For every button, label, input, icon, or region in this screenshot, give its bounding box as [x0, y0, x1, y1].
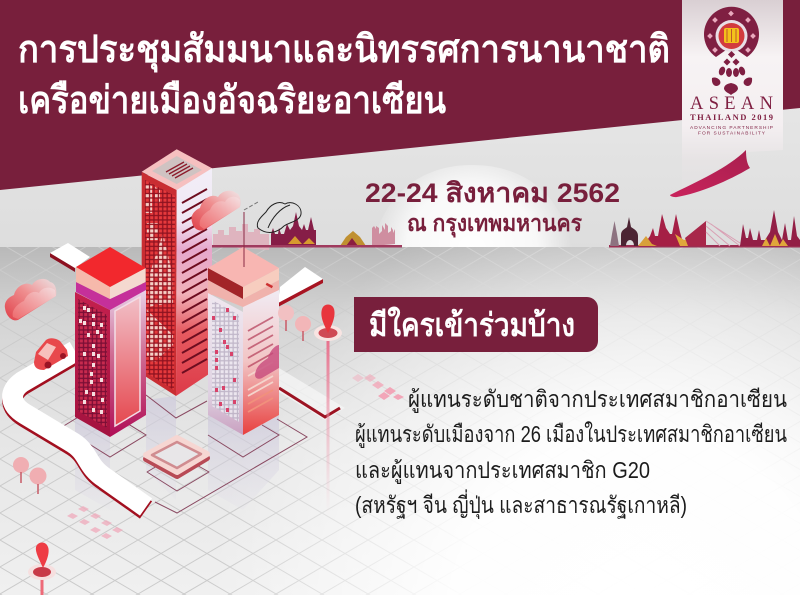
- ASEAN ribbon with logo: ADVANCING PARTNERSHIP: [690, 125, 773, 131]
- building reflections on floor: [75, 396, 279, 510]
- tower stripes: [182, 189, 207, 373]
- title: [18, 29, 670, 122]
- left building magenta band: [76, 282, 146, 310]
- outline cloud: [257, 203, 301, 232]
- left building lit windows: [79, 306, 104, 414]
- title: การประชุมสัมมนาและนิทรรศการนานาชาติ: [18, 29, 670, 73]
- curved main road: [13, 351, 146, 510]
- right building right face: [243, 287, 279, 435]
- trees lower left: [13, 457, 46, 494]
- heading badge: who attends: มีใครเข้าร่วมบ้าง: [369, 306, 575, 343]
- trees right: [278, 305, 311, 341]
- ASEAN wordmark: ASEAN: [690, 94, 773, 114]
- right building roof slab: [208, 268, 243, 299]
- left building body: [75, 292, 110, 437]
- tower right face: [176, 168, 212, 396]
- platform ring: [146, 438, 207, 476]
- pink squares by text: [352, 374, 404, 400]
- right building band: [208, 280, 279, 307]
- road upper left: [50, 243, 90, 272]
- left building roof slab: [76, 267, 110, 299]
- ASEAN logo: [704, 7, 759, 95]
- car: [34, 338, 68, 370]
- title: เครือข่ายเมืองอัจฉริยะอาเซียน: [18, 80, 446, 122]
- road lower right: [279, 368, 345, 420]
- cloud left: [5, 279, 56, 320]
- left building: [75, 247, 146, 437]
- antenna marker with dashed line: [244, 202, 258, 267]
- central tower: [142, 149, 212, 396]
- right building stripes: [248, 317, 273, 367]
- base outlines on floor: [62, 395, 307, 513]
- glow behind date: [372, 165, 572, 247]
- pin lower left: [28, 542, 56, 595]
- heading badge: who attends: [354, 297, 598, 352]
- tower lit windows: [145, 182, 173, 362]
- pin right: [314, 304, 342, 515]
- right building left face: [208, 293, 243, 435]
- tower roof: [142, 149, 212, 190]
- page background: upper grey band: [0, 0, 800, 250]
- ASEAN ribbon with logo: [670, 0, 783, 197]
- cloud upper: [192, 191, 241, 231]
- right building: [208, 247, 279, 435]
- title banner: [0, 0, 800, 190]
- left building inset panel: [115, 297, 140, 426]
- venue: ณ กรุงเทพมหานคร: [407, 210, 583, 238]
- skyline left: [212, 212, 402, 250]
- date: 22-24 สิงหาคม 2562: [365, 178, 620, 208]
- ribbon curl: [670, 150, 750, 197]
- ASEAN ribbon with logo: THAILAND 2019: [690, 112, 773, 122]
- body text: และผู้แทนจากประเทศสมาชิก G20: [355, 457, 650, 484]
- pink squares lower left: [67, 506, 123, 539]
- ASEAN ribbon with logo: FOR SUSTAINABILITY: [698, 130, 766, 136]
- skyline right: [609, 210, 800, 248]
- right building lit windows: [212, 308, 236, 412]
- tower left face with windows: [142, 172, 177, 396]
- road upper right: [278, 267, 323, 307]
- cloud in right building: [255, 345, 279, 379]
- body text: (สหรัฐฯ จีน ญี่ปุ่น และสาธารณรัฐเกาหลี): [355, 489, 687, 519]
- body text: [355, 386, 787, 519]
- isometric floor: [0, 247, 800, 595]
